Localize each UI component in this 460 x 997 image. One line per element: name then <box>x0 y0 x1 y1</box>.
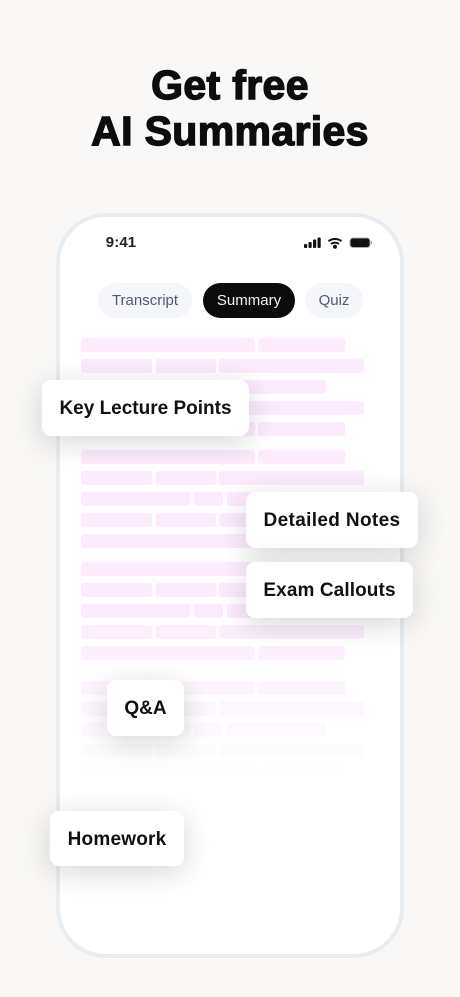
card: Key Lecture Points: Key Lecture Points <box>59 398 232 419</box>
card: Exam Callouts <box>246 562 413 618</box>
card: Q&A <box>107 680 184 736</box>
tab: Quiz: Quiz <box>319 292 349 309</box>
text placeholder block 1 <box>81 338 364 436</box>
phone frame <box>56 213 404 958</box>
title: Get free <box>151 62 309 108</box>
tab: Summary (active) <box>203 283 295 318</box>
text placeholder block 2 <box>81 450 364 548</box>
icon: status indicators <box>304 238 372 249</box>
tab: Transcript: Transcript <box>112 292 178 309</box>
icon: wifi <box>328 239 342 248</box>
card: Detailed Notes <box>246 492 418 548</box>
text placeholder block 4 <box>81 681 364 710</box>
tab: Summary (active): Summary <box>217 292 281 309</box>
card: Key Lecture Points <box>42 380 249 436</box>
card: Q&A: Q&A <box>124 698 167 719</box>
title: AI Summaries <box>91 108 369 154</box>
status bar time: 9:41 <box>106 234 136 251</box>
tab: Transcript <box>98 283 192 318</box>
card: Exam Callouts: Exam Callouts <box>263 580 396 601</box>
icon: signal <box>304 238 321 248</box>
card: Homework: Homework <box>68 829 166 850</box>
card: Detailed Notes: Detailed Notes <box>264 510 400 531</box>
icon: battery <box>350 238 372 248</box>
card: Homework <box>50 811 184 866</box>
title <box>91 62 369 154</box>
text placeholder block 3 <box>81 562 364 660</box>
tab: Quiz <box>305 283 363 318</box>
fade overlay over placeholder text <box>70 620 380 785</box>
